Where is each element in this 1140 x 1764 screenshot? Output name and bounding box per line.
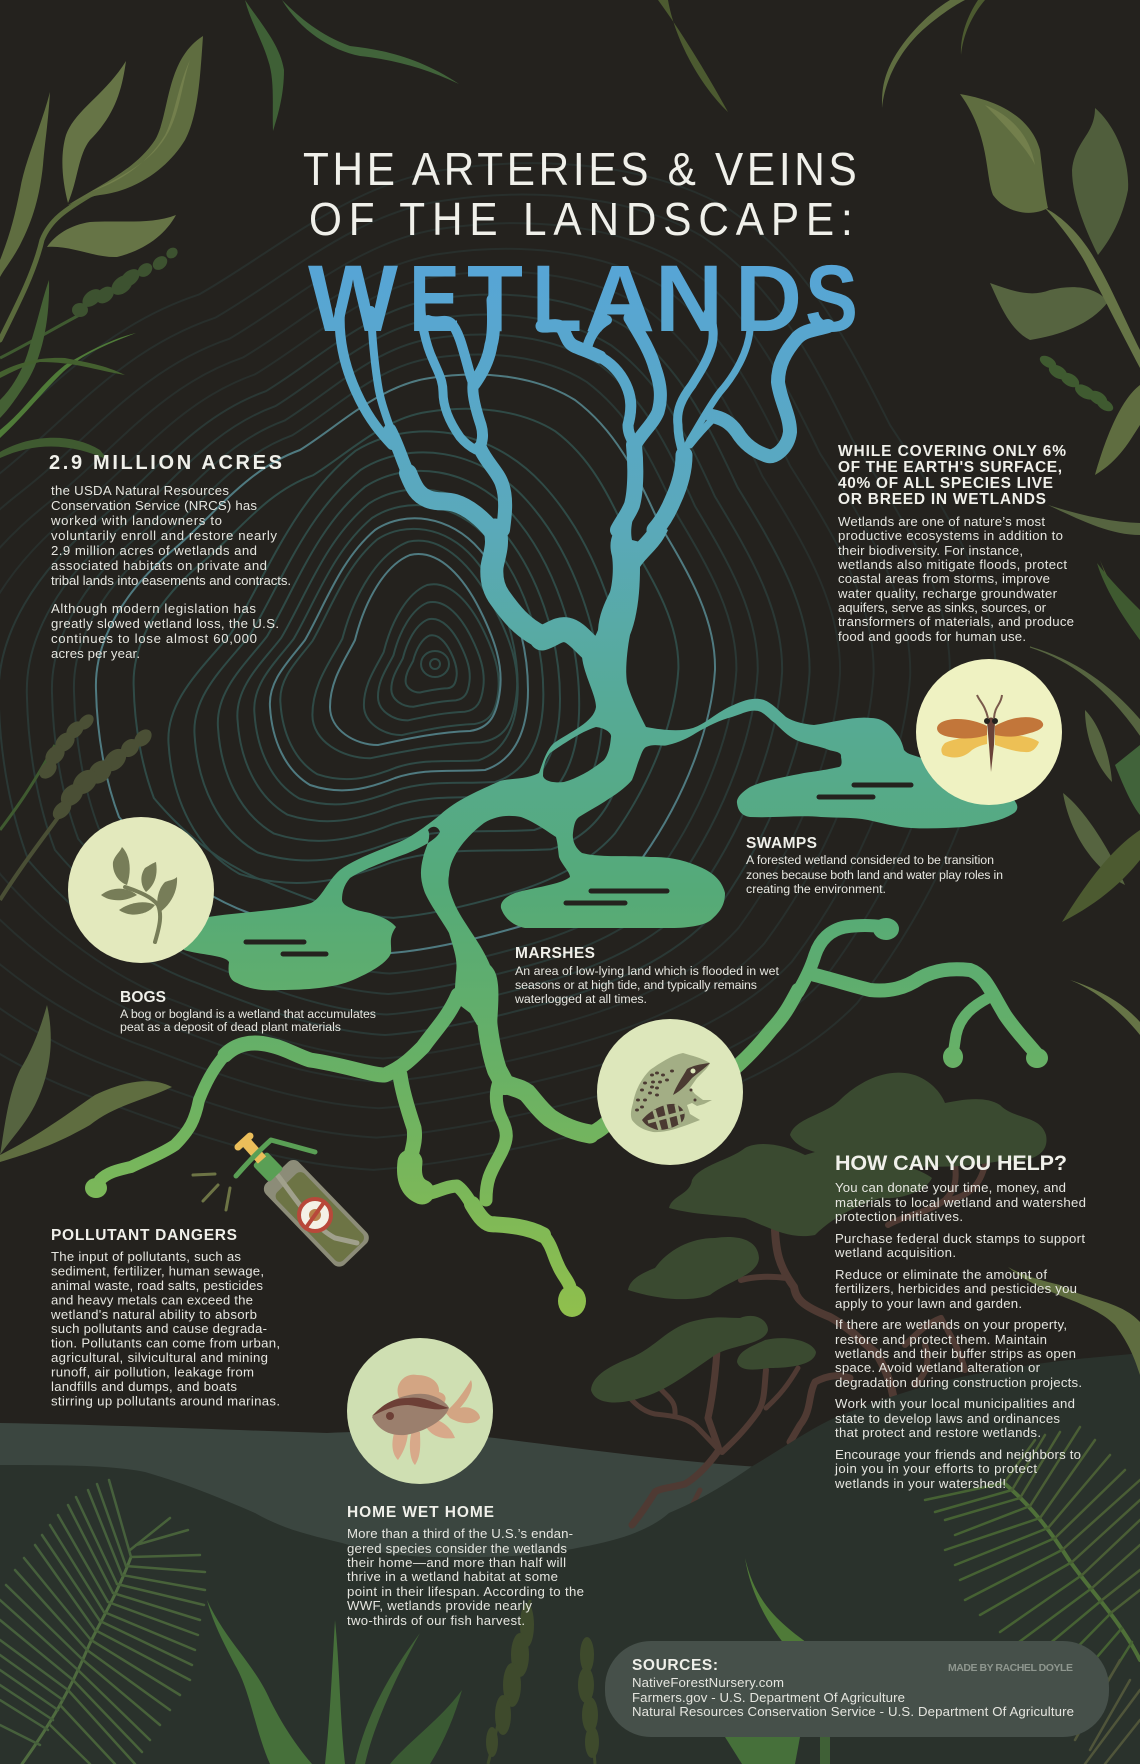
fern: bottom left [0, 1480, 205, 1764]
foliage: top-left branch [0, 36, 203, 340]
text: marshes: seasons or at high tide, and typically remains [515, 978, 757, 992]
text: swamps: SWAMPS [746, 835, 817, 852]
text: how can you help: You can donate your time, money, and [835, 1180, 1066, 1195]
text: how can you help: protection initiatives. [835, 1209, 963, 1224]
foliage: top-right branch [882, 0, 1140, 640]
text: species fact: transformers of materials, and produce [838, 614, 1074, 629]
title: wetlands: T [467, 246, 523, 352]
text: species fact: aquifers, serve as sinks, sources, or [838, 600, 1047, 615]
text: marshes [514, 945, 780, 1006]
text: home wet home: point in their lifespan. According to the [347, 1584, 584, 1599]
spray rays [193, 1174, 230, 1210]
text: how can you help: Work with your local municipalities and [835, 1396, 1075, 1411]
text: pollutant dangers [50, 1227, 280, 1408]
text: 2.9 million acres: associated habitats on private and [51, 558, 267, 573]
circle: butterfly [916, 659, 1062, 805]
sources panel [605, 1641, 1109, 1737]
text: pollutant dangers: stirring up pollutants around marinas. [51, 1394, 280, 1408]
text: how can you help [834, 1151, 1086, 1491]
foliage: grass and seed spike top-left [0, 245, 180, 460]
text: how can you help: restore and protect them. Maintain [835, 1332, 1047, 1347]
topographic contour lines [0, 163, 996, 1170]
text: swamps [746, 835, 1003, 896]
text: species fact: food and goods for human use. [838, 629, 1026, 644]
text: 2.9 million acres: 2.9 MILLION ACRES [49, 452, 282, 474]
text: home wet home: gered species consider the wetlands [347, 1541, 567, 1556]
icon: fish [372, 1375, 480, 1465]
text: species fact: WHILE COVERING ONLY 6% [838, 443, 1066, 460]
text: 2.9 million acres: Although modern legislation has [51, 601, 256, 616]
hill: dark [0, 1353, 1140, 1764]
text: how can you help: Encourage your friends and neighbors to [835, 1447, 1081, 1462]
text: 2.9 million acres: Conservation Service (NRCS) has [51, 498, 257, 513]
text: marshes: MARSHES [515, 945, 595, 962]
title: THE ARTERIES & VEINS [303, 144, 857, 195]
text: home wet home: their home—and more than half will [347, 1555, 566, 1570]
title: wetlands: W [308, 246, 398, 352]
text: home wet home: WWF, wetlands provide nearly [347, 1598, 532, 1613]
text: species fact: their biodiversity. For instance, [838, 543, 1023, 558]
text: home wet home: thrive in a wetland habitat at some [347, 1569, 558, 1584]
text: how can you help: degradation during construction projects. [835, 1375, 1082, 1390]
text: pollutant dangers: such pollutants and cause degrada- [51, 1321, 267, 1336]
text: bogs: A bog or bogland is a wetland that accumulates [120, 1007, 376, 1021]
sources list: Farmers.gov - U.S. Department Of Agriculture [632, 1690, 905, 1705]
lake ripple marks [246, 785, 911, 954]
text: how can you help: Purchase federal duck stamps to support [835, 1231, 1085, 1246]
text: how can you help: that protect and restore wetlands. [835, 1425, 1041, 1440]
bottle neck [252, 1151, 284, 1183]
title [303, 144, 858, 352]
text: how can you help: join you in your efforts to protect [834, 1461, 1037, 1476]
foliage: left side seed spikes [0, 711, 155, 900]
river system [85, 300, 1048, 1317]
foliage: bottom plants [207, 1558, 830, 1764]
text: how can you help: space. Avoid wetland alteration or [835, 1360, 1041, 1375]
text: pollutant dangers: landfills and dumps, and boats [51, 1379, 237, 1394]
text: species fact: OR BREED IN WETLANDS [838, 491, 1046, 508]
text: 2.9 million acres: continues to lose almost 60,000 [51, 631, 257, 646]
sources list: NativeForestNursery.com [632, 1675, 784, 1690]
text: species fact [837, 443, 1074, 644]
text: home wet home [347, 1504, 584, 1628]
text: home wet home: two-thirds of our fish harvest. [347, 1613, 525, 1628]
title: wetlands: E [409, 246, 460, 352]
text: 2.9 million acres: voluntarily enroll and restore nearly [51, 528, 277, 543]
text: bogs: BOGS [120, 989, 166, 1006]
text: swamps: creating the environment. [746, 882, 886, 896]
circle: frog [597, 1019, 743, 1165]
text: how can you help: fertilizers, herbicides and pesticides you [835, 1281, 1077, 1296]
title: wetlands: L [532, 246, 582, 352]
text: species fact: wetlands also mitigate floods, protect [837, 557, 1067, 572]
text: how can you help: apply to your lawn and garden. [835, 1296, 1022, 1311]
text: home wet home: HOME WET HOME [347, 1504, 494, 1521]
text: how can you help: If there are wetlands on your property, [835, 1317, 1067, 1332]
title: wetlands: S [805, 246, 858, 352]
no-bug badge [299, 1199, 331, 1231]
text: 2.9 million acres: acres per year. [51, 646, 140, 661]
foliage: right side leaves [1030, 563, 1140, 1035]
text: 2.9 million acres: the USDA Natural Resources [51, 483, 229, 498]
trees [591, 1073, 1047, 1525]
text: marshes: waterlogged at all times. [514, 992, 647, 1006]
foliage: left lower leaves [0, 1005, 172, 1162]
text: how can you help: wetlands in your watershed! [834, 1476, 1006, 1491]
tree canopies [591, 1073, 1047, 1403]
sprayer tube [236, 1140, 315, 1176]
text: pollutant dangers: sediment, fertilizer, human sewage, [51, 1264, 264, 1278]
text: 2.9 million acres: tribal lands into easements and contracts. [51, 573, 291, 588]
text: species fact: coastal areas from storms, improve [838, 571, 1050, 586]
text: home wet home: More than a third of the U.S.’s endan- [347, 1526, 573, 1541]
text: 2.9 million acres: worked with landowners to [50, 513, 222, 528]
foliage: top leaves [245, 0, 728, 131]
text: 2.9 million acres: 2.9 million acres of wetlands and [51, 543, 257, 558]
liquid [273, 1170, 366, 1264]
text: how can you help: HOW CAN YOU HELP? [835, 1151, 1067, 1175]
title: wetlands: N [655, 246, 723, 352]
title: wetlands: D [735, 246, 802, 352]
bottle body [261, 1157, 372, 1270]
text: pollutant dangers: agricultural, silvicultural and mining [51, 1350, 268, 1365]
text: pollutant dangers: runoff, air pollution, leakage from [51, 1364, 254, 1380]
text: how can you help: wetland acquisition. [834, 1245, 956, 1260]
text: pollutant dangers: POLLUTANT DANGERS [51, 1227, 237, 1244]
sources heading: SOURCES: [632, 1657, 718, 1674]
text: how can you help: Reduce or eliminate the amount of [835, 1267, 1047, 1282]
river: upper drip veins [340, 300, 828, 655]
text: how can you help: wetlands and their buffer strips as open [834, 1346, 1076, 1361]
title: wetlands: A [585, 246, 655, 352]
text: swamps: A forested wetland considered to be transition [746, 853, 994, 867]
text: bogs: peat as a deposit of dead plant materials [120, 1020, 341, 1034]
circle: fish [347, 1338, 493, 1484]
text: swamps: zones because both land and water play roles in [746, 868, 1003, 882]
credit: MADE BY RACHEL DOYLE [948, 1662, 1073, 1674]
icon: spray bottle [193, 1136, 372, 1270]
text: species fact: Wetlands are one of nature’s most [838, 514, 1045, 529]
tree trunks [626, 1165, 985, 1525]
text: bogs [120, 989, 376, 1034]
fern: bottom right [925, 1427, 1140, 1764]
text: marshes: An area of low-lying land which is flooded in wet [515, 964, 780, 978]
text: species fact: OF THE EARTH'S SURFACE, [838, 459, 1062, 476]
icon: frog [631, 1053, 712, 1132]
foliage: right leaf over hill [1008, 1267, 1140, 1375]
sources list: Natural Resources Conservation Service - U.S. Department Of Agriculture [632, 1704, 1074, 1719]
text: pollutant dangers: and heavy metals can exceed the [51, 1292, 253, 1308]
circle: bog plant [68, 817, 214, 963]
sources list [632, 1675, 1074, 1719]
hill: light [0, 1423, 800, 1600]
text: species fact: productive ecosystems in addition to [838, 528, 1063, 543]
icon: butterfly [937, 695, 1043, 772]
icon: sprig of leaves [101, 847, 177, 942]
text: how can you help: materials to local wetland and watershed [835, 1195, 1086, 1210]
river: lower branches [85, 918, 1048, 1317]
text: pollutant dangers: wetland's natural ability to absorb [50, 1307, 257, 1322]
text: pollutant dangers: tion. Pollutants can come from urban, [51, 1336, 280, 1350]
river: trunk and lakes [170, 510, 1017, 1025]
text: 2.9 million acres: greatly slowed wetland loss, the U.S. [51, 616, 279, 631]
text: species fact: 40% OF ALL SPECIES LIVE [838, 475, 1053, 492]
title: OF THE LANDSCAPE: [309, 194, 853, 245]
text: 2.9 million acres [49, 452, 291, 661]
text: pollutant dangers: animal waste, road salts, pesticides [51, 1278, 263, 1293]
text: how can you help: state to develop laws and ordinances [835, 1411, 1060, 1426]
text: pollutant dangers: The input of pollutants, such as [51, 1249, 241, 1264]
text: species fact: water quality, recharge groundwater [837, 586, 1058, 601]
nozzle [246, 1142, 262, 1160]
